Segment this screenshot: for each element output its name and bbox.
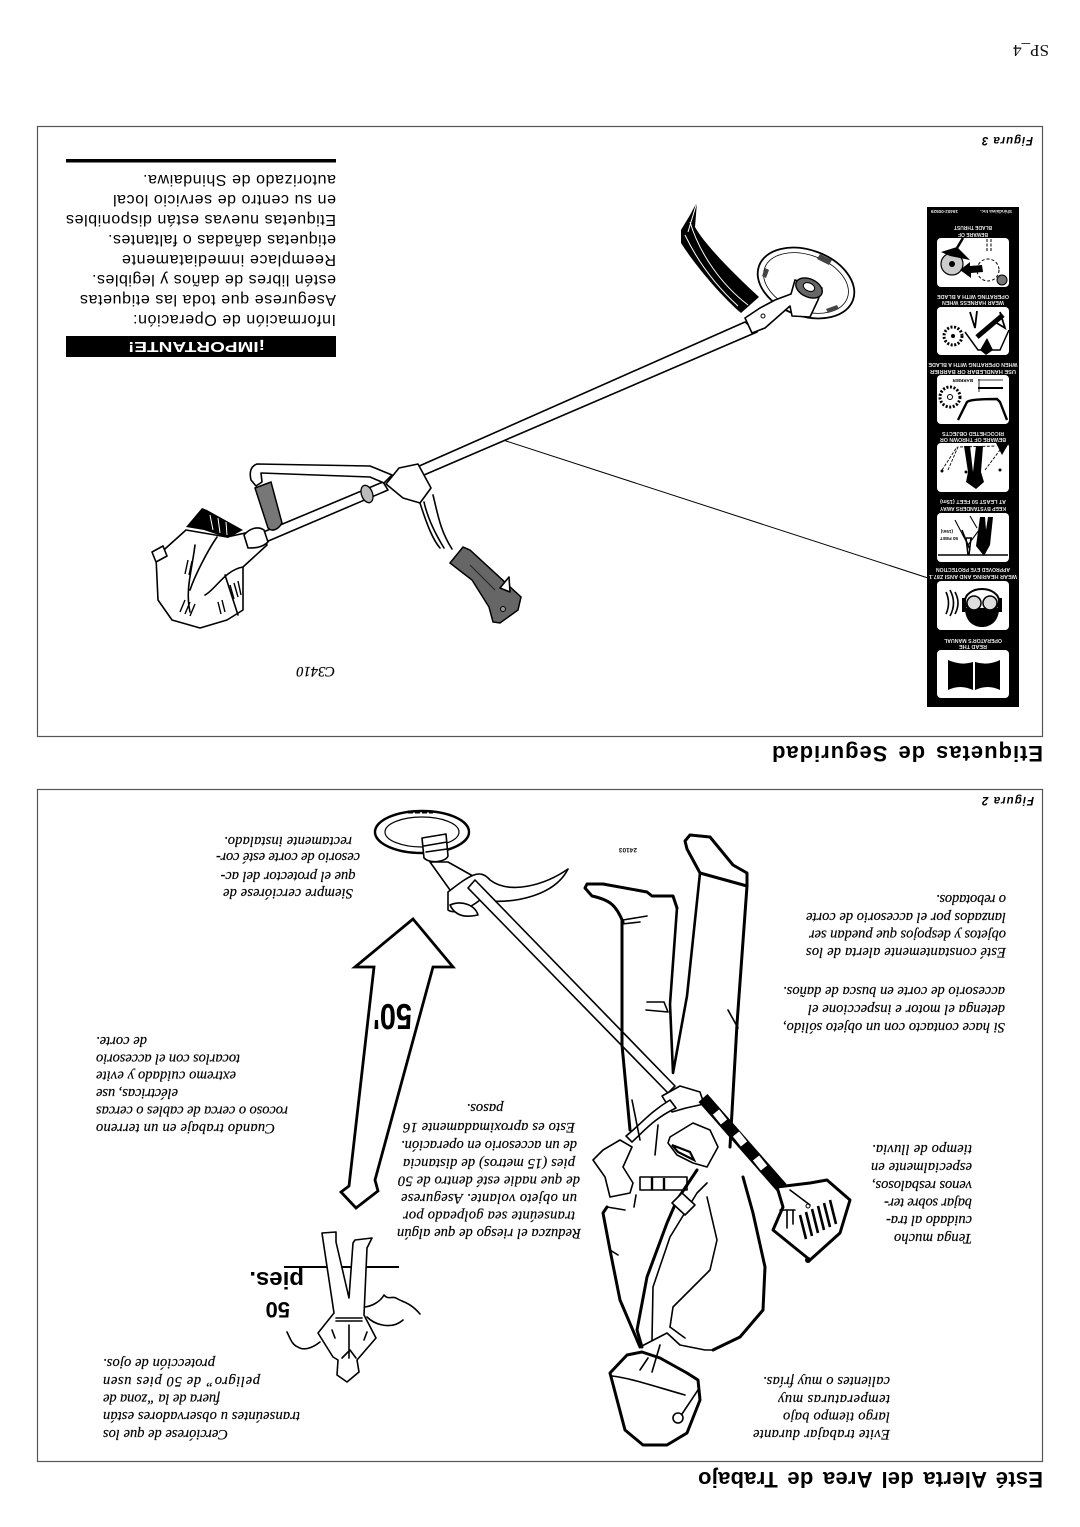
bystander illustration xyxy=(284,1232,420,1382)
top rule of notice xyxy=(66,159,336,162)
decal captions: OPERATING WITH A BLADE xyxy=(937,293,1009,299)
figure 3 caption: Figura 3 xyxy=(981,134,1033,146)
text: rocky terrain: extremo cuidado y evite xyxy=(95,1068,236,1084)
loop handle xyxy=(250,464,392,486)
left boot xyxy=(585,884,677,922)
notice text block: autorizado de Shindaiwa. xyxy=(143,171,336,188)
safety decal xyxy=(927,207,1019,707)
text: rocky terrain: de corte. xyxy=(96,1033,147,1049)
model code: C3410 xyxy=(296,663,335,679)
text: extreme temperatures xyxy=(752,1373,891,1442)
notice text block: Información de Operación: xyxy=(133,311,336,328)
text: slippery ground: bajar sobre ter- xyxy=(884,1194,972,1210)
text: slippery ground: tiempo de lluvia. xyxy=(872,1141,972,1157)
notice text block xyxy=(66,171,336,328)
text: extreme temperatures: Evite trabajar durante xyxy=(752,1426,891,1442)
text: guard installed xyxy=(216,833,360,901)
loop tube xyxy=(626,1100,676,1142)
notice text block: Etiquetas nuevas están disponibles xyxy=(66,211,336,228)
cutting disc xyxy=(748,235,864,331)
page number: SP_4 xyxy=(1013,41,1049,60)
loop grip xyxy=(255,482,282,530)
icon: bystanders xyxy=(937,513,1009,562)
gearbox xyxy=(745,274,825,333)
operator illustration xyxy=(375,811,850,1445)
disc and guard of trimmer xyxy=(375,811,568,916)
clamp xyxy=(386,464,431,503)
important banner xyxy=(66,336,336,357)
text: bystanders eye protection: fuera de la “zona de xyxy=(102,1390,220,1406)
text: solid object contact: detenga el motor e inspeccione el xyxy=(808,1001,1005,1017)
torso xyxy=(603,1100,765,1350)
bushes xyxy=(287,1295,420,1349)
notice text block: Reemplace inmediatamente xyxy=(122,251,336,268)
text: thrown objects warning: objetos y despojos que puedan ser xyxy=(809,926,1006,942)
text: rocky terrain: Cuando trabaje en un terreno xyxy=(96,1120,275,1136)
text: bystanders eye protection: Cerciórese de que los xyxy=(103,1426,228,1442)
safety decal: 19402-00529 xyxy=(930,209,958,214)
control handle xyxy=(450,547,521,623)
text: rocky terrain xyxy=(95,1033,288,1136)
right boot xyxy=(685,835,747,886)
text: reduce risk 50 feet: de que nadie esté dentro de 50 xyxy=(397,1172,580,1188)
heading: work area alert: Esté Alerta del Area de Trabajo xyxy=(698,1467,1043,1492)
text: reduce risk 50 feet: pasos. xyxy=(467,1100,504,1116)
text: slippery ground: cuidado al tra- xyxy=(886,1212,972,1228)
text: thrown objects warning xyxy=(805,891,1007,960)
decal captions: WEAR HARNESS WHEN xyxy=(942,299,1004,305)
text: guard installed: que el protector del ac- xyxy=(220,868,356,884)
left hand xyxy=(593,1140,633,1197)
collar xyxy=(359,484,375,504)
icon: blade thrust xyxy=(937,238,1009,287)
engine xyxy=(773,1180,850,1263)
text: reduce risk 50 feet: Esto es aproximadamente 16 xyxy=(402,1119,576,1135)
legs xyxy=(622,873,747,1147)
leader line from shaft to label xyxy=(503,440,928,578)
image code: 24103 xyxy=(619,846,637,853)
text: bystanders eye protection: transeúntes u observadores están xyxy=(103,1408,300,1424)
icon: handlebar or barrier xyxy=(937,375,1009,424)
icon: bystanders: 50 FEET xyxy=(940,536,958,541)
icon: hearing and eye protection xyxy=(937,581,1009,630)
decal captions: USE HANDLEBAR OR BARRIER xyxy=(930,368,1016,374)
text: guard installed: rectamente instalado. xyxy=(224,833,352,849)
text: slippery ground: Tenga mucho xyxy=(894,1230,972,1246)
panel: figure 2 work area xyxy=(38,790,1042,1462)
text: extreme temperatures: temperaturas muy xyxy=(777,1391,890,1407)
text: slippery ground: venos resbalosos, xyxy=(872,1177,972,1193)
decal captions: WHEN OPERATING WITH A BLADE xyxy=(928,361,1018,367)
decal captions: AT LEAST 50 FEET (15m) xyxy=(940,498,1006,504)
shaft xyxy=(417,322,757,475)
label: 50 feet distance xyxy=(249,1266,304,1322)
decal header: Shindaiwa Inc. xyxy=(980,209,1012,214)
icon: manual book xyxy=(937,650,1009,698)
notice text block: Asegurese que toda las etiquetas xyxy=(80,291,336,308)
decal captions: BEWARE OF xyxy=(957,231,988,237)
text: reduce risk 50 feet xyxy=(397,1100,582,1241)
right hand xyxy=(668,1123,718,1167)
text: thrown objects warning: lanzados por el accesorio de corte xyxy=(805,909,1006,925)
arrow label: 50' xyxy=(373,996,412,1037)
decal captions: RICOCHETED OBJECTS xyxy=(942,430,1004,436)
belt buckle xyxy=(640,1177,687,1190)
icon: handlebar or barrier: BARRIER xyxy=(952,378,973,383)
text: extreme temperatures: largo tiempo bajo xyxy=(783,1408,890,1424)
notice text block: etiquetas dañadas o faltantes. xyxy=(108,231,336,248)
text: guard installed: Siempre cerciórese de xyxy=(222,885,353,901)
figure 2 caption: Figura 2 xyxy=(981,794,1034,806)
engine xyxy=(152,508,268,628)
text: rocky terrain: tocarlos con el accesorio xyxy=(96,1050,240,1066)
text: reduce risk 50 feet: Reduzca el riesgo de que algún xyxy=(397,1225,582,1241)
notice text block: en su centro de servicio local xyxy=(113,191,336,208)
text: rocky terrain: rocoso o cerca de cables o cercas xyxy=(96,1103,288,1119)
text: guard installed: cesorio de corte esté cor- xyxy=(216,849,360,865)
helmet and head xyxy=(610,1345,700,1445)
shaft xyxy=(468,880,675,1093)
decal captions: KEEP BYSTANDERS AWAY xyxy=(940,505,1006,511)
panel: figure 3 safety labels xyxy=(38,126,1042,736)
text: reduce risk 50 feet: pies (15 metros) de distancia xyxy=(403,1155,576,1171)
text: bystanders eye protection xyxy=(102,1355,300,1442)
decal captions: OPERATOR'S MANUAL xyxy=(943,637,1002,643)
text: thrown objects warning: o rebotados. xyxy=(936,891,1006,907)
decal captions: READ THE xyxy=(959,643,987,649)
text: reduce risk 50 feet: un objeto volante. Asegurese xyxy=(400,1190,577,1206)
important banner: ¡IMPORTANTE! xyxy=(128,338,265,355)
decal captions xyxy=(928,224,1018,649)
icon: thrown objects xyxy=(937,443,1009,492)
text: solid object contact: accesorio de corte en busca de daños. xyxy=(783,983,1005,999)
decal captions: WEAR HEARING AND ANSI Z87.1 xyxy=(929,573,1017,579)
label: 50 feet distance: 50 xyxy=(266,1297,290,1322)
clamp xyxy=(662,1086,704,1112)
decal captions: BLADE THRUST xyxy=(954,224,992,230)
control cable xyxy=(420,495,452,549)
decal captions: BEWARE OF THROWN OR xyxy=(940,436,1006,442)
text: thrown objects warning: Esté constantemente alerta de los xyxy=(806,944,1007,960)
rear shaft stripes xyxy=(703,1098,782,1188)
text: slippery ground xyxy=(871,1141,972,1246)
text: solid object contact: Si hace contacto con un objeto sólido, xyxy=(783,1019,1005,1035)
text: reduce risk 50 feet: de un accesorio en operación. xyxy=(401,1137,577,1153)
text: extreme temperatures: calientes o muy frías. xyxy=(763,1373,890,1389)
notice text block: estén libres de daños y legibles. xyxy=(92,271,336,288)
icon: bystanders: (15m) xyxy=(940,529,953,534)
brushcutter illustration xyxy=(152,202,864,628)
label: 50 feet distance: pies. xyxy=(249,1266,304,1293)
guard xyxy=(681,202,759,313)
double arrow 50 feet xyxy=(341,919,453,1208)
text: rocky terrain: eléctricas, use xyxy=(95,1085,178,1101)
harness strap xyxy=(637,1170,707,1347)
text: bystanders eye protection: peligro” de 50 pies usen xyxy=(103,1373,261,1389)
heading: safety labels: Etiquetas de Seguridad xyxy=(772,741,1043,766)
text: solid object contact xyxy=(783,983,1005,1035)
icon: harness xyxy=(937,307,1009,355)
decal captions: APPROVED EYE PROTECTION xyxy=(936,566,1010,572)
text: reduce risk 50 feet: transeúnte sea golpeado por xyxy=(403,1207,575,1223)
text: bystanders eye protection: protección de ojos. xyxy=(103,1355,216,1371)
text: slippery ground: especialmente en xyxy=(871,1159,972,1175)
